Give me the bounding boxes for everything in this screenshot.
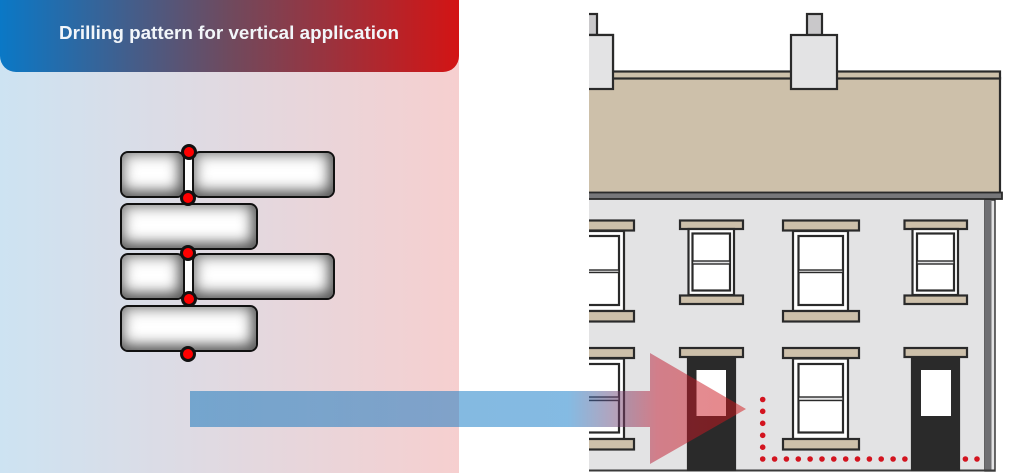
brick drilling pattern diagram (120, 144, 335, 362)
brick row 3 left (120, 253, 185, 300)
arrow (190, 353, 746, 464)
drill point 3 (180, 245, 196, 261)
drill point 5 (180, 346, 196, 362)
brick row 1 left (120, 151, 185, 198)
drill point 2 (180, 190, 196, 206)
title: Drilling pattern for vertical application (59, 23, 399, 43)
upper window 2 (680, 220, 743, 304)
heading banner (0, 0, 459, 72)
drill point 4 (181, 291, 197, 307)
drill point 1 (181, 144, 197, 160)
brick row 3 right (192, 253, 335, 300)
brick row 1 right (192, 151, 335, 198)
mortar gap, row 1 (184, 152, 193, 198)
door 1 (680, 348, 743, 470)
upper window 3 (783, 220, 859, 322)
lower window 1 (585, 348, 634, 450)
gutter (585, 192, 1002, 199)
downpipe (985, 200, 995, 471)
left chimney (585, 14, 613, 89)
central chimney (791, 14, 837, 89)
white mask left of building (459, 0, 589, 473)
door 2 (904, 348, 967, 470)
base line (589, 470, 995, 472)
brick row 2 (120, 203, 258, 250)
mortar gap, row 3 (184, 254, 193, 300)
panel: gradient background (0, 0, 459, 473)
lower window 3 (783, 348, 859, 450)
red drill dots (760, 397, 980, 462)
roof (585, 72, 1000, 193)
upper window 4 (904, 220, 967, 304)
left chimney stack front (585, 35, 613, 89)
wall (589, 199, 985, 470)
upper window 1 (585, 220, 634, 322)
brick row 4 (120, 305, 258, 352)
